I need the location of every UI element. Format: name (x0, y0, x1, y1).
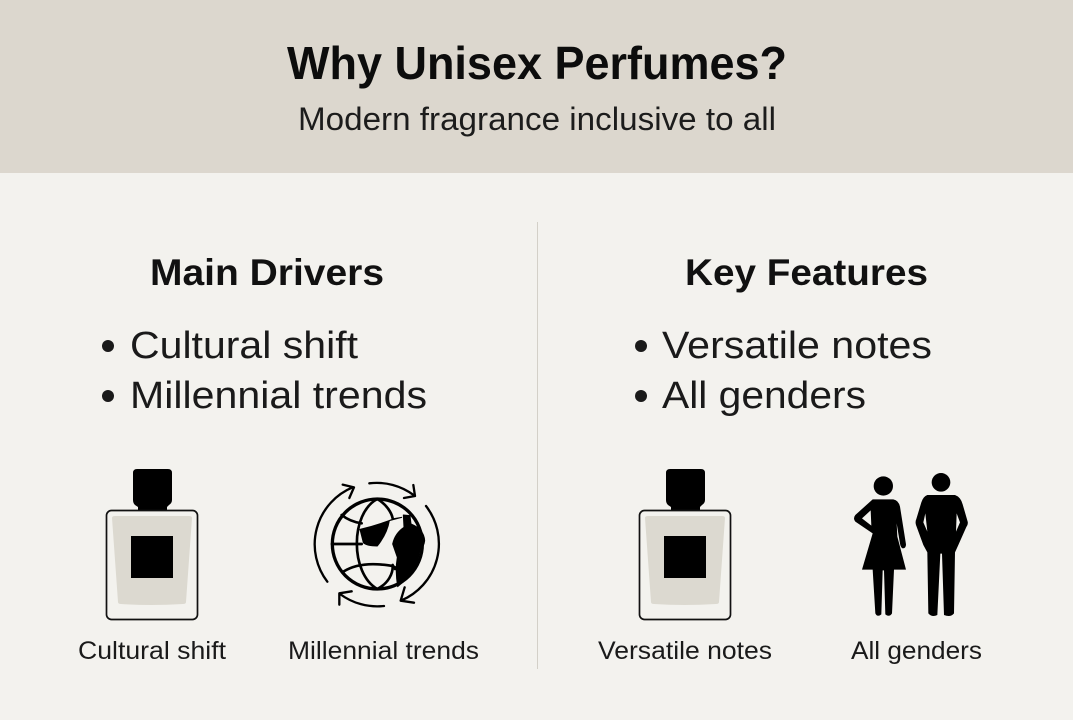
title: Why Unisex Perfumes? (287, 37, 787, 89)
bullet list: main drivers (102, 325, 427, 417)
icon: perfume bottle (640, 469, 730, 620)
icon label: versatile notes: Versatile notes (598, 637, 772, 665)
bullet list: key features: All genders (662, 375, 866, 417)
header band (0, 0, 1073, 173)
bullet list: key features: Versatile notes (662, 325, 932, 367)
heading: main drivers: Main Drivers (150, 252, 384, 293)
icon label: cultural shift: Cultural shift (78, 637, 226, 665)
icon: globe with arrows (315, 483, 439, 606)
heading: key features: Key Features (685, 252, 928, 293)
bullet list: main drivers: Cultural shift (130, 325, 358, 367)
icon label: millennial trends: Millennial trends (288, 637, 479, 665)
bullet list: main drivers: Millennial trends (130, 375, 427, 417)
panel: key features (598, 252, 982, 665)
icon: perfume bottle (106, 469, 198, 620)
bullet list: key features (635, 325, 932, 417)
icon label: all genders: All genders (851, 637, 982, 665)
subtitle: Modern fragrance inclusive to all (298, 101, 776, 137)
icon: woman and man figures (854, 473, 968, 616)
panel: main drivers (78, 252, 479, 665)
